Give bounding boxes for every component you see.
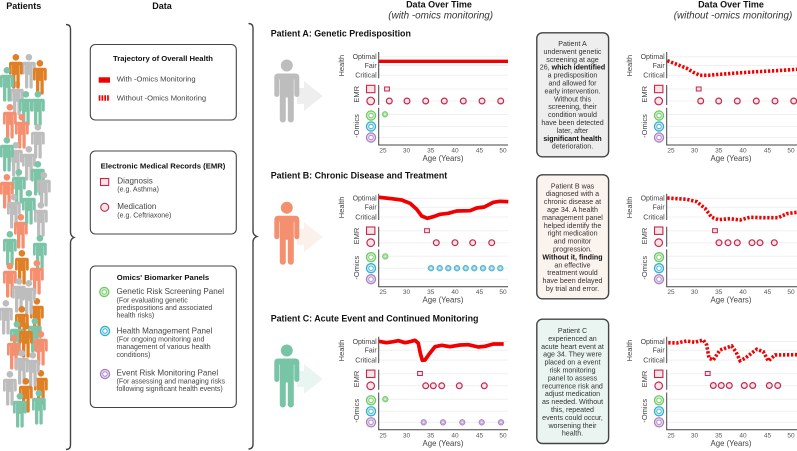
panel: omics biomarker legend: (For evaluating genetic [116, 297, 188, 304]
callout: patient C: acute heart event at [541, 343, 604, 351]
chart: patient A without omics: 40 [739, 148, 747, 154]
chart: patient C with omics: 30 [403, 432, 410, 439]
callout: patient C [537, 319, 609, 444]
panel: trajectory legend: Trajectory of Overall Health [113, 54, 213, 63]
chart: patient C without omics: -Omics [640, 399, 649, 423]
heading: Data Over Time without omics [674, 0, 792, 22]
chart: patient C with omics: -Omics [352, 399, 361, 423]
callout: patient C: as needed. Without [542, 398, 603, 406]
chart: patient A without omics [625, 52, 797, 163]
icon: patient A figure [274, 60, 299, 122]
chart: patient A with omics: Critical [355, 73, 377, 80]
arrow: patient A [297, 81, 323, 111]
chart: patient A with omics: 25 [379, 148, 387, 154]
chart: patient C with omics [337, 337, 508, 448]
chart: patient C with omics: Health [337, 340, 346, 361]
chart: patient C without omics [625, 337, 797, 448]
callout: patient A: have been detected [541, 119, 604, 127]
chart: patient B without omics: Critical [643, 214, 665, 221]
chart: patient C without omics: 45 [764, 432, 771, 439]
panel: EMR legend: (e.g. Ceftriaxone) [117, 212, 171, 220]
chart: patient C without omics: Optimal [641, 339, 665, 346]
chart: patient B with omics: 45 [476, 289, 483, 296]
callout: patient C: adjust medication [545, 390, 600, 398]
panel: EMR legend: Electronic Medical Records (EMR) [101, 162, 226, 170]
chart: patient A with omics: 40 [451, 148, 459, 154]
chart: patient C without omics: EMR [640, 370, 649, 387]
chart: patient C without omics: Critical [643, 357, 665, 364]
callout: patient B: by trial and error. [546, 285, 599, 293]
chart: patient B without omics: 30 [691, 289, 698, 296]
arrow: patient B [297, 222, 323, 252]
chart: patient A with omics: 50 [499, 148, 507, 154]
panel: omics biomarker legend: conditions) [116, 352, 150, 359]
callout: patient B: chronic disease at [544, 198, 601, 206]
panel: omics biomarker legend: Genetic Risk Screening Panel [116, 287, 224, 296]
panel: trajectory legend: Without -Omics Monitoring [117, 93, 206, 102]
chart: patient B without omics: 25 [667, 289, 675, 296]
panel: omics biomarker legend: following significant health events) [116, 386, 223, 393]
callout: patient A: significant health [543, 135, 602, 143]
chart: patient C with omics: 50 [499, 432, 507, 439]
chart: patient C without omics: 30 [691, 432, 698, 439]
panel: omics biomarker legend: Omics' Biomarker Panels [117, 273, 209, 282]
chart: patient A without omics: Critical [643, 73, 665, 80]
chart: patient C with omics: Optimal [353, 339, 377, 346]
chart: patient C without omics: 25 [667, 432, 675, 439]
chart: patient B with omics: 25 [379, 289, 387, 296]
chart: patient A with omics: Health [337, 55, 346, 77]
callout: patient B: have been delayed [543, 277, 603, 285]
callout: patient A [537, 33, 609, 157]
crowd of patients [0, 54, 51, 428]
callout: patient C: panel to assess [548, 374, 598, 382]
panel: omics biomarker legend: health risks) [116, 313, 154, 320]
chart: patient B with omics: Fair [365, 204, 377, 212]
chart: patient B with omics [337, 194, 508, 305]
callout: patient B: progression. [553, 246, 592, 254]
chart: patient A without omics: 35 [715, 148, 723, 154]
icon: patient C figure [274, 344, 299, 408]
chart: patient A with omics: EMR [352, 85, 361, 103]
chart: patient A without omics: -Omics [640, 114, 649, 138]
chart: patient C with omics: 40 [451, 432, 459, 439]
chart: patient C without omics: 40 [739, 432, 747, 439]
chart: patient A with omics: -Omics [352, 114, 361, 138]
chart: patient A with omics [337, 52, 508, 163]
title: Patient C: Patient C: Acute Event and Continued Monitoring [271, 314, 478, 324]
chart: patient C with omics: 25 [379, 432, 387, 439]
callout: patient A: a predisposition [548, 72, 597, 80]
arrow: patient C [297, 364, 323, 394]
chart: patient B without omics: Health [625, 197, 634, 218]
panel: omics biomarker legend: Event Risk Monitoring Panel [116, 368, 218, 377]
chart: patient B with omics: 35 [427, 289, 435, 296]
callout: patient C: recurrence risk and [542, 382, 603, 390]
chart: patient C with omics: Age (Years) [423, 439, 464, 448]
chart: patient B with omics: Health [337, 197, 346, 218]
chart: patient B without omics: Fair [653, 204, 665, 212]
chart: patient A with omics: Age (Years) [423, 154, 464, 163]
panel: EMR legend: Diagnosis [117, 176, 153, 185]
panel: trajectory legend: With -Omics Monitoring [117, 75, 196, 84]
chart: patient B without omics: 40 [739, 289, 747, 296]
chart: patient B with omics: Critical [355, 214, 377, 221]
heading: Patients: Patients [6, 1, 41, 11]
panel: trajectory legend [90, 44, 236, 120]
chart: patient C without omics: Age (Years) [711, 439, 752, 448]
chart: patient B with omics: 40 [451, 289, 459, 296]
heading: Data Over Time with omics [388, 0, 493, 22]
panel: omics biomarker legend: Health Management Panel [116, 326, 213, 335]
callout: patient B: age 34. A health [547, 206, 598, 214]
callout: patient B: helped identify the [544, 222, 601, 230]
callout: patient B [537, 175, 609, 299]
chart: patient B without omics: Optimal [641, 196, 665, 203]
chart: patient A without omics: 50 [787, 148, 795, 154]
callout: patient A: underwent genetic [544, 48, 602, 56]
chart: patient A without omics: 45 [764, 148, 771, 154]
chart: patient B with omics: EMR [352, 227, 361, 244]
chart: patient A without omics: EMR [640, 85, 649, 103]
chart: patient C with omics: Critical [355, 357, 377, 364]
chart: patient C with omics: EMR [352, 370, 361, 387]
chart: patient A with omics: Fair [365, 63, 377, 70]
callout: patient B: and monitor [554, 238, 592, 246]
chart: patient A without omics: Fair [653, 63, 665, 70]
chart: patient B without omics: Age (Years) [711, 296, 752, 305]
callout: patient A: early intervention. [544, 87, 601, 95]
callout: patient A: and allowed for [548, 80, 597, 88]
heading: Data Over Time without omics: (without -omics monitoring) [674, 10, 792, 22]
chart: patient A with omics: 45 [476, 148, 483, 154]
callout: patient A: screening at age [546, 56, 599, 64]
callout: patient A: condition would [548, 111, 597, 119]
callout: patient C: worsening their [547, 422, 597, 430]
callout: patient B: diagnosed with a [546, 190, 599, 198]
chart: patient C with omics: 45 [476, 432, 483, 439]
chart: patient B without omics: -Omics [640, 256, 649, 280]
panel: EMR legend: Medication [117, 202, 156, 211]
chart: patient C without omics: Health [625, 340, 634, 361]
callout: patient B: Patient B was [551, 182, 595, 190]
callout: patient C: age 34. They were [543, 351, 602, 359]
callout: patient A: screening, their [548, 103, 597, 111]
chart: patient A with omics: Optimal [353, 54, 377, 61]
callout: patient C: Patient C [558, 327, 587, 335]
chart: patient B with omics: 30 [403, 289, 410, 296]
panel: EMR legend [90, 151, 236, 234]
chart: patient C without omics: 35 [715, 432, 723, 439]
chart: patient C with omics: 35 [427, 432, 435, 439]
panel: EMR legend: (e.g. Asthma) [117, 186, 159, 194]
callout: patient A: deterioration. [552, 143, 593, 151]
brace: data to charts [248, 24, 257, 449]
title: Patient A: Patient A: Genetic Predisposition [271, 28, 411, 38]
chart: patient A with omics: 30 [403, 148, 410, 154]
chart: patient B without omics: 35 [715, 289, 723, 296]
chart: patient B without omics: 45 [764, 289, 771, 296]
chart: patient B with omics: Optimal [353, 196, 377, 203]
callout: patient B: Without it, finding [542, 253, 603, 261]
callout: patient B: management panel [542, 214, 603, 222]
chart: patient C with omics: Fair [365, 348, 377, 355]
callout: patient A: Without this [554, 95, 591, 103]
callout: patient C: events could occur, [542, 414, 603, 422]
chart: patient A without omics: 30 [691, 148, 698, 154]
callout: patient C: placed on a event [544, 359, 601, 367]
callout: patient A: Patient A [558, 40, 587, 48]
chart: patient A without omics: Optimal [641, 54, 665, 61]
callout: patient B: right medication [547, 230, 598, 238]
chart: patient B with omics: -Omics [352, 256, 361, 280]
chart: patient B without omics: EMR [640, 227, 649, 244]
callout: patient C: risk monitoring [549, 366, 596, 374]
heading: Data: Data [152, 1, 173, 11]
callout: patient B: treatment would [547, 269, 598, 277]
heading: Data Over Time with omics: (with -omics monitoring) [388, 10, 493, 22]
chart: patient B without omics [625, 194, 797, 305]
callout: patient C: experienced an [548, 335, 597, 343]
callout: patient C: this, repeated [551, 406, 594, 414]
chart: patient B with omics: 50 [499, 289, 507, 296]
callout: patient B: an effective [554, 261, 591, 269]
callout: patient A: later, after [557, 127, 589, 135]
title: Patient B: Patient B: Chronic Disease and Treatment [271, 170, 447, 180]
chart: patient A without omics: Age (Years) [711, 154, 752, 163]
panel: omics biomarker legend: (For ongoing monitoring and [116, 336, 205, 343]
panel: omics biomarker legend: management of various health [116, 344, 211, 351]
callout: patient C: health. [562, 430, 583, 438]
chart: patient C without omics: 50 [787, 432, 795, 439]
panel: omics biomarker legend [90, 266, 236, 408]
chart: patient A without omics: Health [625, 55, 634, 77]
panel: omics biomarker legend: predispositions and associated [116, 305, 212, 312]
panel: omics biomarker legend: (For assessing and managing risks [116, 378, 226, 385]
chart: patient B with omics: Age (Years) [423, 296, 464, 305]
chart: patient A without omics: 25 [667, 148, 675, 154]
chart: patient B without omics: 50 [787, 289, 795, 296]
chart: patient C without omics: Fair [653, 348, 665, 355]
chart: patient A with omics: 35 [427, 148, 435, 154]
brace: patients to data [66, 24, 74, 450]
callout: patient A: 26, which identified [540, 64, 605, 72]
icon: patient B figure [274, 202, 299, 265]
